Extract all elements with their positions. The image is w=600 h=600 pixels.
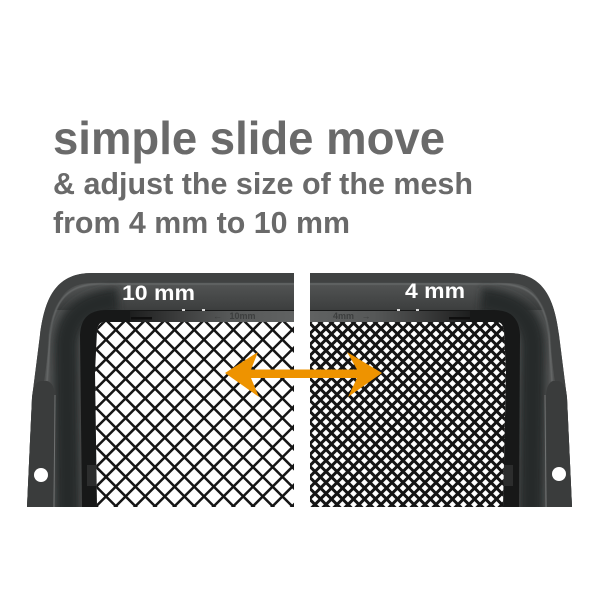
panel: left half, 10 mm mesh: [27, 273, 294, 507]
label: 4 mm: 4 mm: [405, 280, 465, 303]
side panel edge: left: [54, 395, 55, 507]
opening: right: [310, 310, 520, 507]
slot mark: right: [449, 317, 470, 320]
embossed mark: 4 mm: 4mm →: [333, 311, 371, 321]
mounting hole: left: [34, 468, 48, 482]
clip tab: right: [503, 465, 513, 486]
panel: right half, 4 mm mesh: [310, 273, 572, 507]
label: 10 mm: 10 mm: [122, 282, 195, 305]
embossed mark: 10 mm: ← 10mm: [213, 311, 256, 321]
title: simple slide move: [53, 112, 445, 164]
arrow: double-headed orange: [225, 352, 382, 397]
tick marks: right: [397, 309, 419, 311]
clip tab: left: [87, 465, 97, 486]
opening: left: [80, 310, 294, 507]
mounting hole: right: [552, 467, 566, 481]
mesh: 10 mm: [95, 322, 294, 507]
side panel edge: right: [545, 395, 546, 507]
side panel: right: [546, 381, 572, 507]
subtitle line one: & adjust the size of the mesh: [53, 166, 473, 201]
slot mark: left: [131, 317, 152, 320]
track: left: [130, 311, 294, 322]
mesh backing: 4 mm: [310, 322, 506, 507]
frame: right: [310, 273, 572, 507]
track: right: [310, 311, 470, 322]
subtitle line two: from 4 mm to 10 mm: [53, 205, 350, 240]
mesh: 4 mm: [310, 322, 506, 507]
side panel: left: [27, 381, 55, 507]
frame: left: [20, 270, 300, 515]
tick marks: left: [182, 309, 205, 311]
mesh backing: 10 mm: [95, 322, 294, 507]
